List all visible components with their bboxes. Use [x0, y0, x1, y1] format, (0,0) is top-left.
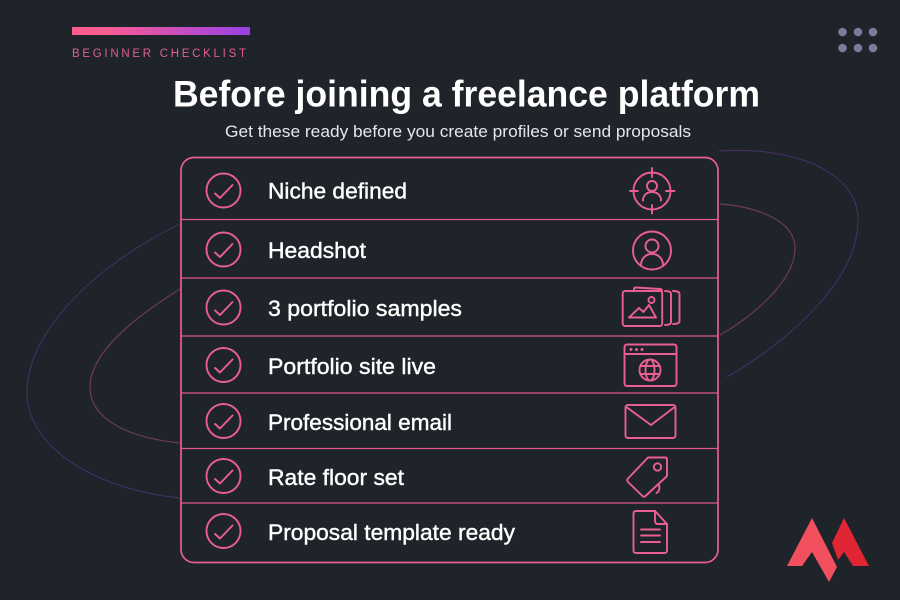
accent gradient bar — [72, 27, 250, 35]
background orbit: inner — [90, 204, 795, 443]
check icon — [206, 290, 240, 324]
icon: price tag — [627, 458, 667, 497]
row label: Professional email — [268, 410, 452, 435]
icon: image stack — [623, 288, 680, 326]
icon: envelope — [626, 405, 676, 438]
icon: document — [634, 511, 667, 553]
subtitle: Get these ready before you create profiles or send proposals — [225, 123, 691, 141]
eyebrow label: BEGINNER CHECKLIST — [72, 48, 246, 60]
row: proposal template ready — [206, 511, 667, 553]
icon: person — [633, 232, 671, 270]
icon: target person — [630, 168, 674, 214]
check icon — [206, 404, 240, 438]
row: rate floor set — [206, 458, 667, 497]
check icon — [206, 514, 240, 548]
row: niche defined — [206, 168, 674, 214]
row: portfolio site live — [206, 344, 676, 386]
row label: Rate floor set — [268, 465, 404, 490]
panel frame — [181, 158, 718, 562]
background orbit: outer — [27, 150, 858, 498]
row label: 3 portfolio samples — [268, 296, 462, 321]
check icon — [206, 348, 240, 382]
row label: Proposal template ready — [268, 520, 515, 545]
row label: Headshot — [268, 238, 366, 263]
row: portfolio samples — [206, 288, 680, 326]
panel: checklist — [181, 158, 718, 562]
logo — [787, 518, 869, 582]
icon: browser globe — [624, 344, 676, 386]
check icon — [206, 174, 240, 208]
check icon — [206, 459, 240, 493]
title: Before joining a freelance platform — [173, 74, 760, 114]
row: headshot — [206, 232, 671, 270]
check icon — [206, 232, 240, 266]
row label: Niche defined — [268, 178, 407, 204]
icon: menu dots — [838, 28, 877, 52]
row: professional email — [206, 404, 676, 438]
row label: Portfolio site live — [268, 354, 436, 379]
row dividers — [181, 220, 718, 503]
